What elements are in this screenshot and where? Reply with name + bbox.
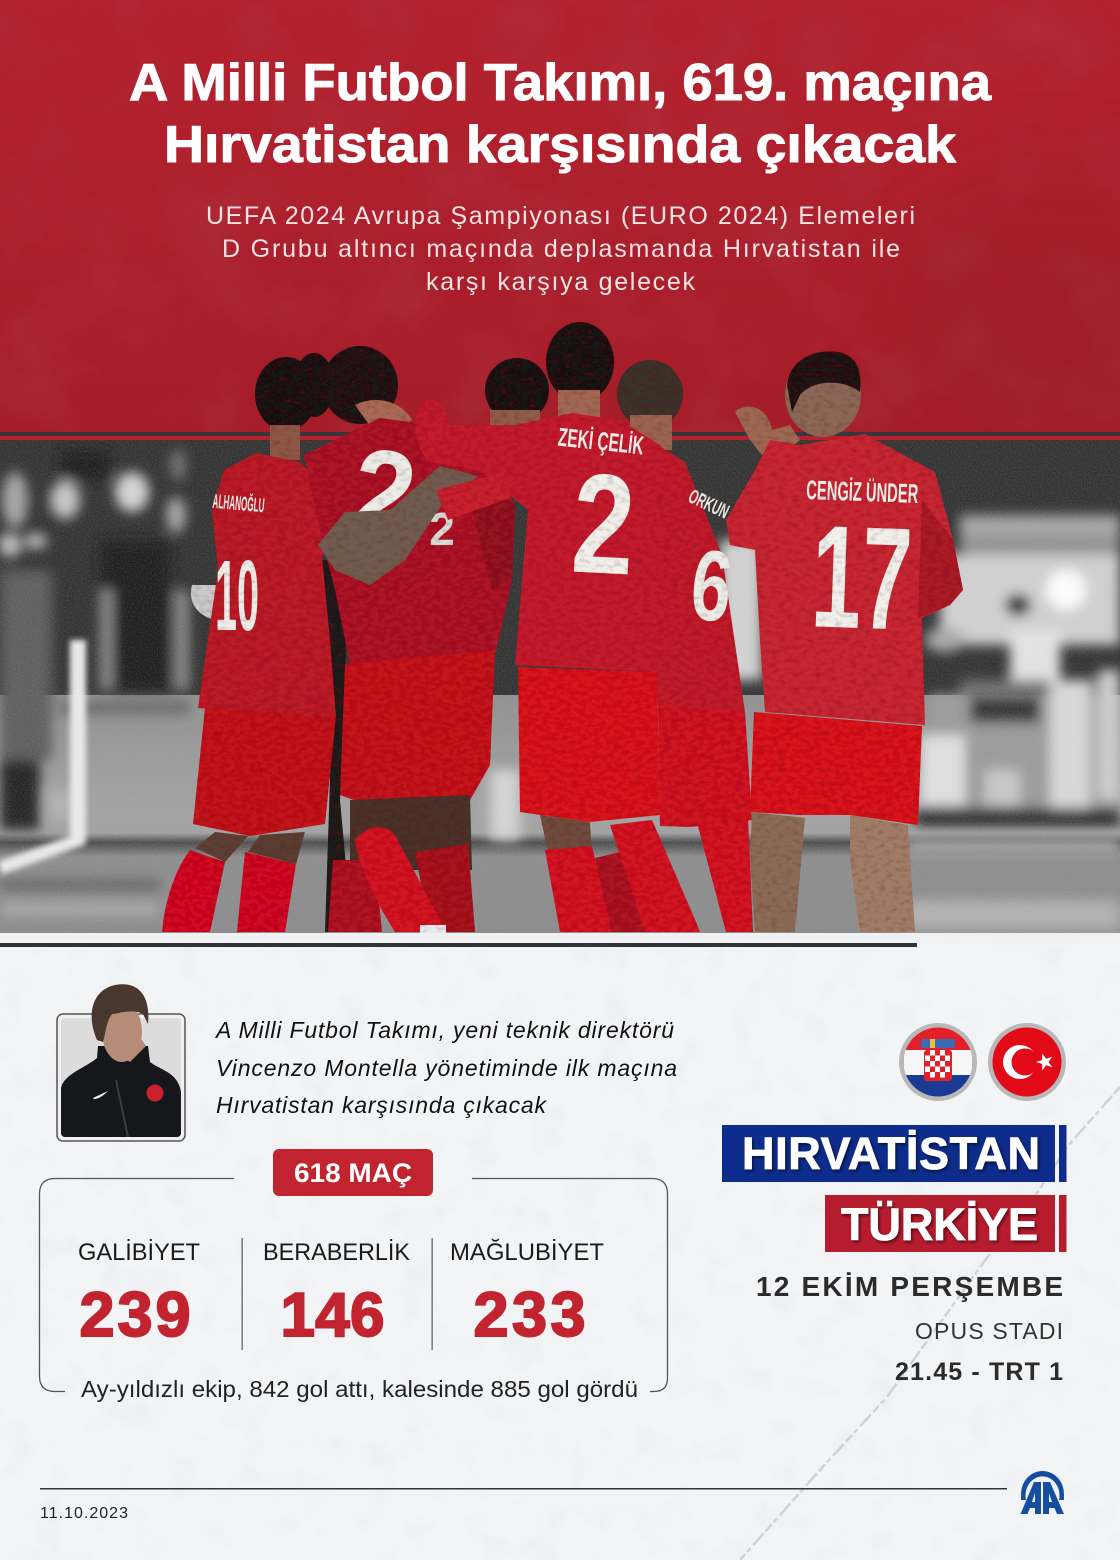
match time and channel: 21.45 - TRT 1 bbox=[895, 1358, 1063, 1386]
team bar: Hırvatistan: HIRVATİSTAN bbox=[742, 1128, 1040, 1179]
goals note: Ay-yıldızlı ekip, 842 gol attı, kalesinde 885 gol gördü bbox=[81, 1376, 638, 1402]
stat: mağlubiyet: 233 bbox=[474, 1280, 586, 1350]
stat: galibiyet: GALİBİYET bbox=[78, 1239, 200, 1266]
stat: galibiyet bbox=[78, 1239, 200, 1350]
coach text: Vincenzo Montella yönetiminde ilk maçına bbox=[216, 1055, 677, 1081]
player: Orkun number 6: ORKUN bbox=[685, 486, 732, 523]
title: Hırvatistan karşısında çıkacak bbox=[164, 116, 956, 174]
player: Zeki Çelik number 2: 2 bbox=[568, 444, 639, 606]
title bbox=[129, 54, 992, 174]
stat: beraberlik: 146 bbox=[280, 1281, 384, 1350]
player: number 22 with tattooed arm: 2 bbox=[429, 503, 455, 555]
stat: mağlubiyet bbox=[450, 1239, 604, 1350]
badge: 618 maç: 618 MAÇ bbox=[294, 1158, 412, 1188]
player: Orkun number 6 bbox=[617, 360, 753, 932]
player: Çalhanoğlu number 10 bbox=[162, 353, 350, 932]
photo background: blurred black and white stadium bbox=[0, 440, 1120, 933]
match venue: OPUS STADI bbox=[915, 1318, 1063, 1344]
shadow behind the huddle bbox=[322, 560, 346, 932]
player: Cengiz Ünder number 17: 17 bbox=[809, 494, 915, 661]
page background: light textured paper bbox=[0, 933, 1120, 1560]
player: Zeki Çelik number 2 bbox=[415, 322, 700, 932]
stat: beraberlik: BERABERLİK bbox=[263, 1239, 410, 1266]
footer rule bbox=[40, 1488, 1007, 1490]
photo: Turkish national team players huddling bbox=[162, 322, 963, 933]
player: Cengiz Ünder number 17 bbox=[726, 351, 963, 932]
subtitle: D Grubu altıncı maçında deplasmanda Hırvatistan ile bbox=[222, 235, 900, 263]
player: Zeki Çelik number 2: ZEKİ ÇELİK bbox=[557, 422, 645, 460]
player: number 22 with tattooed arm: 2 bbox=[344, 422, 424, 565]
coach text: A Milli Futbol Takımı, yeni teknik direktörü bbox=[214, 1017, 674, 1043]
stat: galibiyet: 239 bbox=[80, 1280, 190, 1350]
player: Cengiz Ünder number 17: CENGİZ ÜNDER bbox=[806, 475, 919, 509]
subtitle bbox=[206, 202, 915, 296]
badge: 618 maç bbox=[273, 1149, 433, 1196]
coach text bbox=[214, 1017, 677, 1118]
player: number 22 with tattooed arm bbox=[304, 346, 515, 933]
coach text: Hırvatistan karşısında çıkacak bbox=[216, 1092, 548, 1118]
stats panel bbox=[40, 1149, 668, 1402]
subtitle: karşı karşıya gelecek bbox=[426, 268, 696, 296]
match date: 12 EKİM PERŞEMBE bbox=[756, 1271, 1063, 1302]
player: Çalhanoğlu number 10: 10 bbox=[215, 540, 259, 652]
player: arm across huddle bbox=[318, 466, 510, 585]
player: hidden centre head bbox=[470, 358, 549, 590]
player: Çalhanoğlu number 10: ALHANOĞLU bbox=[212, 489, 266, 517]
stat: beraberlik bbox=[263, 1239, 410, 1350]
coach portrait: Vincenzo Montella bbox=[57, 984, 185, 1141]
header: red textured band bbox=[0, 0, 1120, 440]
date: 11.10.2023 bbox=[40, 1505, 128, 1522]
icon: Anadolu Agency logo bbox=[1020, 1471, 1064, 1514]
icon: Croatian flag bbox=[899, 1023, 977, 1101]
divider below photo bbox=[0, 933, 1120, 947]
subtitle: UEFA 2024 Avrupa Şampiyonası (EURO 2024) Elemeleri bbox=[206, 202, 915, 230]
icon: Turkish flag bbox=[988, 1023, 1066, 1101]
team bar: Türkiye: TÜRKİYE bbox=[841, 1199, 1038, 1250]
stat: mağlubiyet: MAĞLUBİYET bbox=[450, 1239, 604, 1266]
title: A Milli Futbol Takımı, 619. maçına bbox=[129, 54, 992, 112]
player: Orkun number 6: 6 bbox=[686, 528, 737, 644]
